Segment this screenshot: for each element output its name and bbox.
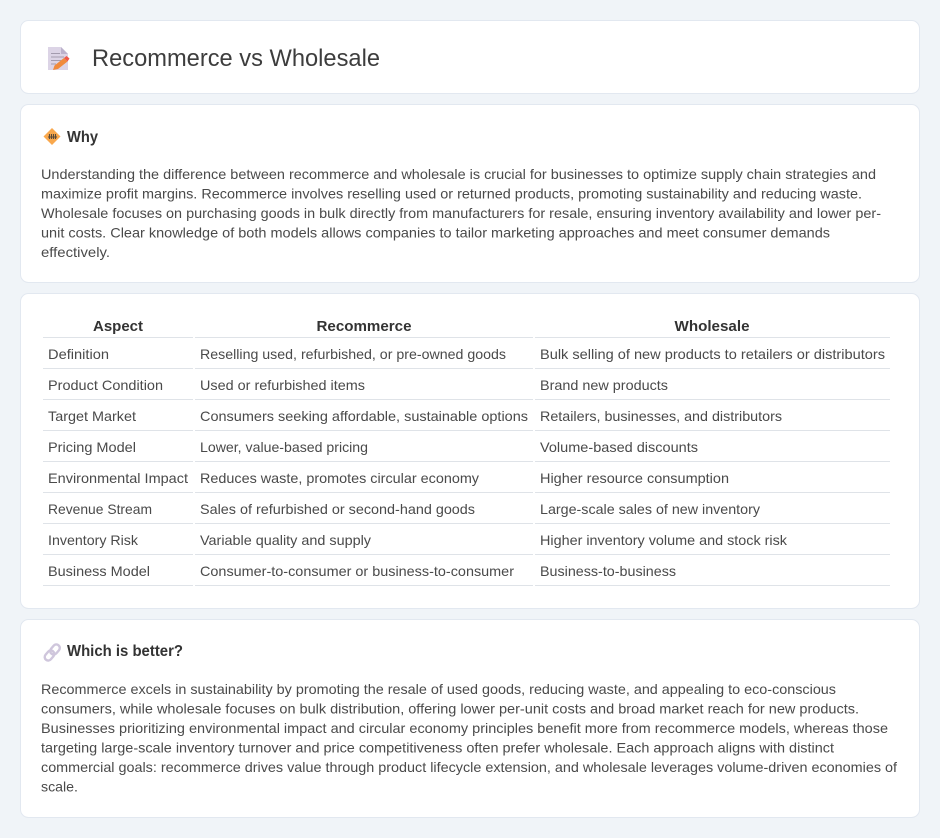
row: business model: Consumer-to-consumer or business-to-consumer	[200, 563, 514, 579]
row: product condition: Product Condition	[48, 377, 163, 393]
text block: why paragraph: effectively.	[41, 244, 110, 260]
text block: why paragraph: maximize profit margins. Recommerce involves reselling used or returned products, promoting sustainability and reducing waste.	[41, 186, 862, 202]
table header	[93, 318, 750, 335]
row: business model	[48, 563, 676, 579]
text block: why paragraph: Wholesale focuses on purchasing goods in bulk directly from manufacturers for resale, ensuring inventory availability and lower per-	[41, 205, 881, 221]
table header: Wholesale	[674, 318, 750, 335]
heading: which is better: Which is better?	[67, 643, 183, 660]
table header: Recommerce	[316, 318, 412, 335]
text block: which is better paragraph: Businesses prioritizing environmental impact and circular economy principles benefit more from recommerce models, whereas those	[41, 720, 888, 736]
text block: which is better paragraph: commercial goals: recommerce drives value through product lifecycle extension, and wholesale leverages volume-driven economies of	[41, 759, 897, 775]
text block: why paragraph: Understanding the difference between recommerce and wholesale is crucial for businesses to optimize supply chain strategies and	[41, 166, 876, 182]
row: revenue stream: Revenue Stream	[48, 501, 152, 517]
icon: memo with pencil	[48, 47, 70, 70]
text block: which is better paragraph: consumers, while wholesale focuses on bulk distribution, offering lower per-unit costs and broad market reach for new products.	[41, 700, 859, 716]
row: revenue stream: Large-scale sales of new inventory	[540, 501, 760, 517]
row: product condition: Used or refurbished items	[200, 377, 365, 393]
text block: why paragraph: unit costs. Clear knowledge of both models allows companies to tailor marketing approaches and meet consumer demands	[41, 224, 830, 240]
icon: diamond sign	[44, 128, 60, 145]
row: definition: Reselling used, refurbished, or pre-owned goods	[200, 346, 506, 362]
row: environmental impact: Higher resource consumption	[540, 470, 729, 486]
heading: why: Why	[67, 129, 98, 146]
row: target market: Consumers seeking affordable, sustainable options	[200, 408, 528, 424]
row: pricing model: Pricing Model	[48, 439, 136, 455]
row: pricing model: Lower, value-based pricing	[200, 439, 368, 455]
row: definition	[48, 346, 885, 362]
row: definition: Bulk selling of new products to retailers or distributors	[540, 346, 885, 362]
row: pricing model	[48, 439, 698, 455]
row: product condition: Brand new products	[540, 377, 668, 393]
row: inventory risk: Variable quality and supply	[200, 532, 371, 548]
icon: chain link	[43, 643, 61, 662]
text block: which is better paragraph: targeting large-scale inventory turnover and price competitiveness often prefer wholesale. Each approach aligns with distinct	[41, 740, 834, 756]
panel: why	[20, 104, 920, 282]
text block: which is better paragraph: scale.	[41, 778, 78, 794]
panel: which is better	[20, 620, 920, 818]
title: Recommerce vs Wholesale	[92, 45, 380, 72]
row: business model: Business-to-business	[540, 563, 676, 579]
text block: which is better paragraph: Recommerce excels in sustainability by promoting the resale of used goods, reducing waste, and appealing to eco-conscious	[41, 681, 836, 697]
table header: Aspect	[93, 318, 143, 335]
text block: why paragraph	[41, 166, 881, 260]
row: business model: Business Model	[48, 563, 150, 579]
row: environmental impact: Environmental Impact	[48, 470, 188, 486]
row: environmental impact	[48, 470, 729, 486]
row: pricing model: Volume-based discounts	[540, 439, 698, 455]
row: target market: Retailers, businesses, and distributors	[540, 408, 782, 424]
row: inventory risk: Higher inventory volume and stock risk	[540, 532, 788, 548]
row: inventory risk: Inventory Risk	[48, 532, 139, 548]
text block: which is better paragraph	[41, 681, 897, 794]
panel: title header	[20, 20, 920, 94]
row: revenue stream	[48, 501, 760, 517]
row: target market: Target Market	[48, 408, 136, 424]
panel: comparison table	[20, 294, 920, 608]
row: inventory risk	[48, 532, 788, 548]
row: target market	[48, 408, 782, 424]
row: revenue stream: Sales of refurbished or second-hand goods	[200, 501, 475, 517]
row: product condition	[48, 377, 668, 393]
row: environmental impact: Reduces waste, promotes circular economy	[200, 470, 479, 486]
row: definition: Definition	[48, 346, 109, 362]
